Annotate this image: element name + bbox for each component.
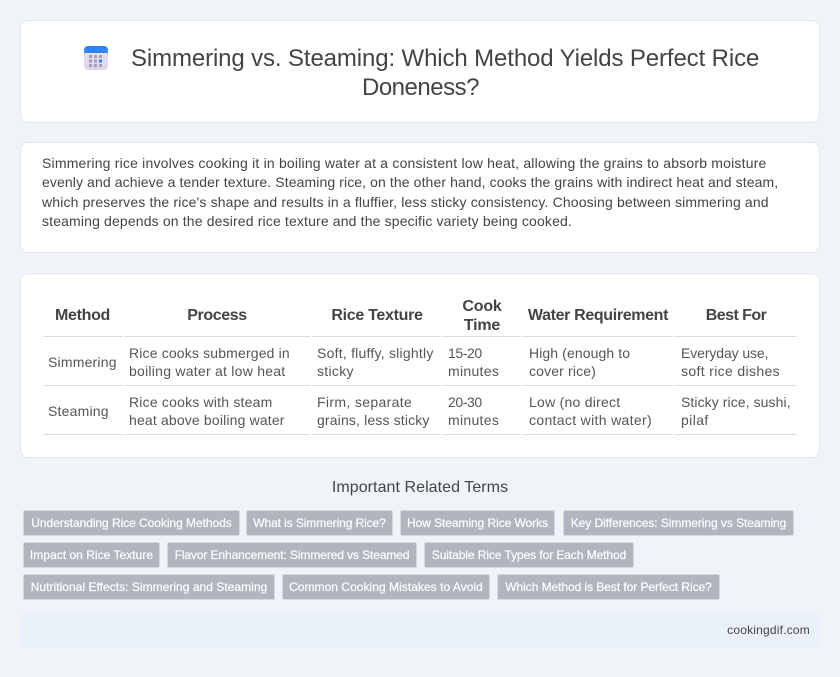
intro text: Simmering rice involves cooking it in boiling water at a consistent low heat, allowing the grains to absorb moisture — [42, 154, 767, 170]
table headers: Process — [187, 307, 247, 324]
table rows: boiling water at low heat — [129, 363, 285, 379]
table headers: Water Requirement — [528, 307, 668, 324]
table rows: grains, less sticky — [317, 412, 430, 428]
table rows: High (enough to — [529, 345, 630, 361]
footer bar — [20, 613, 820, 647]
table rows: Rice cooks submerged in — [129, 345, 290, 361]
intro text: which preserves the rice's shape and results in a fluffier, less sticky consistency. Choosing between simmering and — [42, 194, 769, 210]
table rows: cover rice) — [529, 363, 596, 379]
panel: introduction — [20, 142, 820, 253]
icon: calendar — [84, 46, 108, 70]
related terms tags: Nutritional Effects: Simmering and Steaming — [31, 580, 267, 594]
table rows: Sticky rice, sushi, — [681, 394, 791, 410]
table headers: Cook — [462, 298, 502, 315]
related terms heading: Important Related Terms — [332, 479, 508, 496]
related terms tags: What is Simmering Rice? — [253, 516, 386, 530]
table headers: Rice Texture — [331, 307, 423, 324]
table headers: Time — [464, 317, 500, 334]
table rows: contact with water) — [529, 412, 652, 428]
title: Doneness? — [362, 74, 479, 101]
table rows: pilaf — [681, 412, 709, 428]
table headers — [55, 298, 767, 334]
table headers: Best For — [706, 307, 766, 324]
table rows: 15-20 — [448, 345, 482, 361]
table rows: Everyday use, — [681, 345, 768, 361]
table rows: minutes — [448, 412, 499, 428]
related terms tags: Key Differences: Simmering vs Steaming — [571, 516, 786, 530]
intro text — [42, 154, 778, 229]
intro text: evenly and achieve a tender texture. Steaming rice, on the other hand, cooks the grains with indirect heat and steam, — [42, 174, 778, 190]
header panel — [20, 20, 820, 123]
intro text: steaming depends on the desired rice texture and the specific variety being cooked. — [42, 213, 572, 229]
table rows: heat above boiling water — [129, 412, 285, 428]
related terms tags: Impact on Rice Texture — [30, 548, 153, 562]
title — [131, 45, 759, 101]
table rows: Simmering — [48, 354, 117, 370]
related terms tags: Common Cooking Mistakes to Avoid — [289, 580, 483, 594]
table rows: Steaming — [48, 403, 109, 419]
table rows: Firm, separate — [317, 394, 412, 410]
table rows — [43, 336, 797, 435]
related terms tags: Suitable Rice Types for Each Method — [432, 548, 626, 562]
table rows: Rice cooks with steam — [129, 394, 272, 410]
table rows: soft rice dishes — [681, 363, 780, 379]
related terms tags: Flavor Enhancement: Simmered vs Steamed — [175, 548, 409, 562]
table rows: Low (no direct — [529, 394, 620, 410]
panel: comparison table — [20, 273, 820, 458]
table rows: minutes — [448, 363, 499, 379]
related terms tags — [23, 510, 794, 600]
table rows: sticky — [317, 363, 354, 379]
table headers: Method — [55, 307, 110, 324]
related terms tags: Understanding Rice Cooking Methods — [31, 516, 232, 530]
footer credit: cookingdif.com — [727, 623, 810, 637]
related terms tags: Which Method is Best for Perfect Rice? — [505, 580, 712, 594]
title: Simmering vs. Steaming: Which Method Yields Perfect Rice — [131, 45, 759, 72]
table rows: Soft, fluffy, slightly — [317, 345, 434, 361]
related terms tags: How Steaming Rice Works — [407, 516, 548, 530]
table rows: 20-30 — [448, 394, 482, 410]
